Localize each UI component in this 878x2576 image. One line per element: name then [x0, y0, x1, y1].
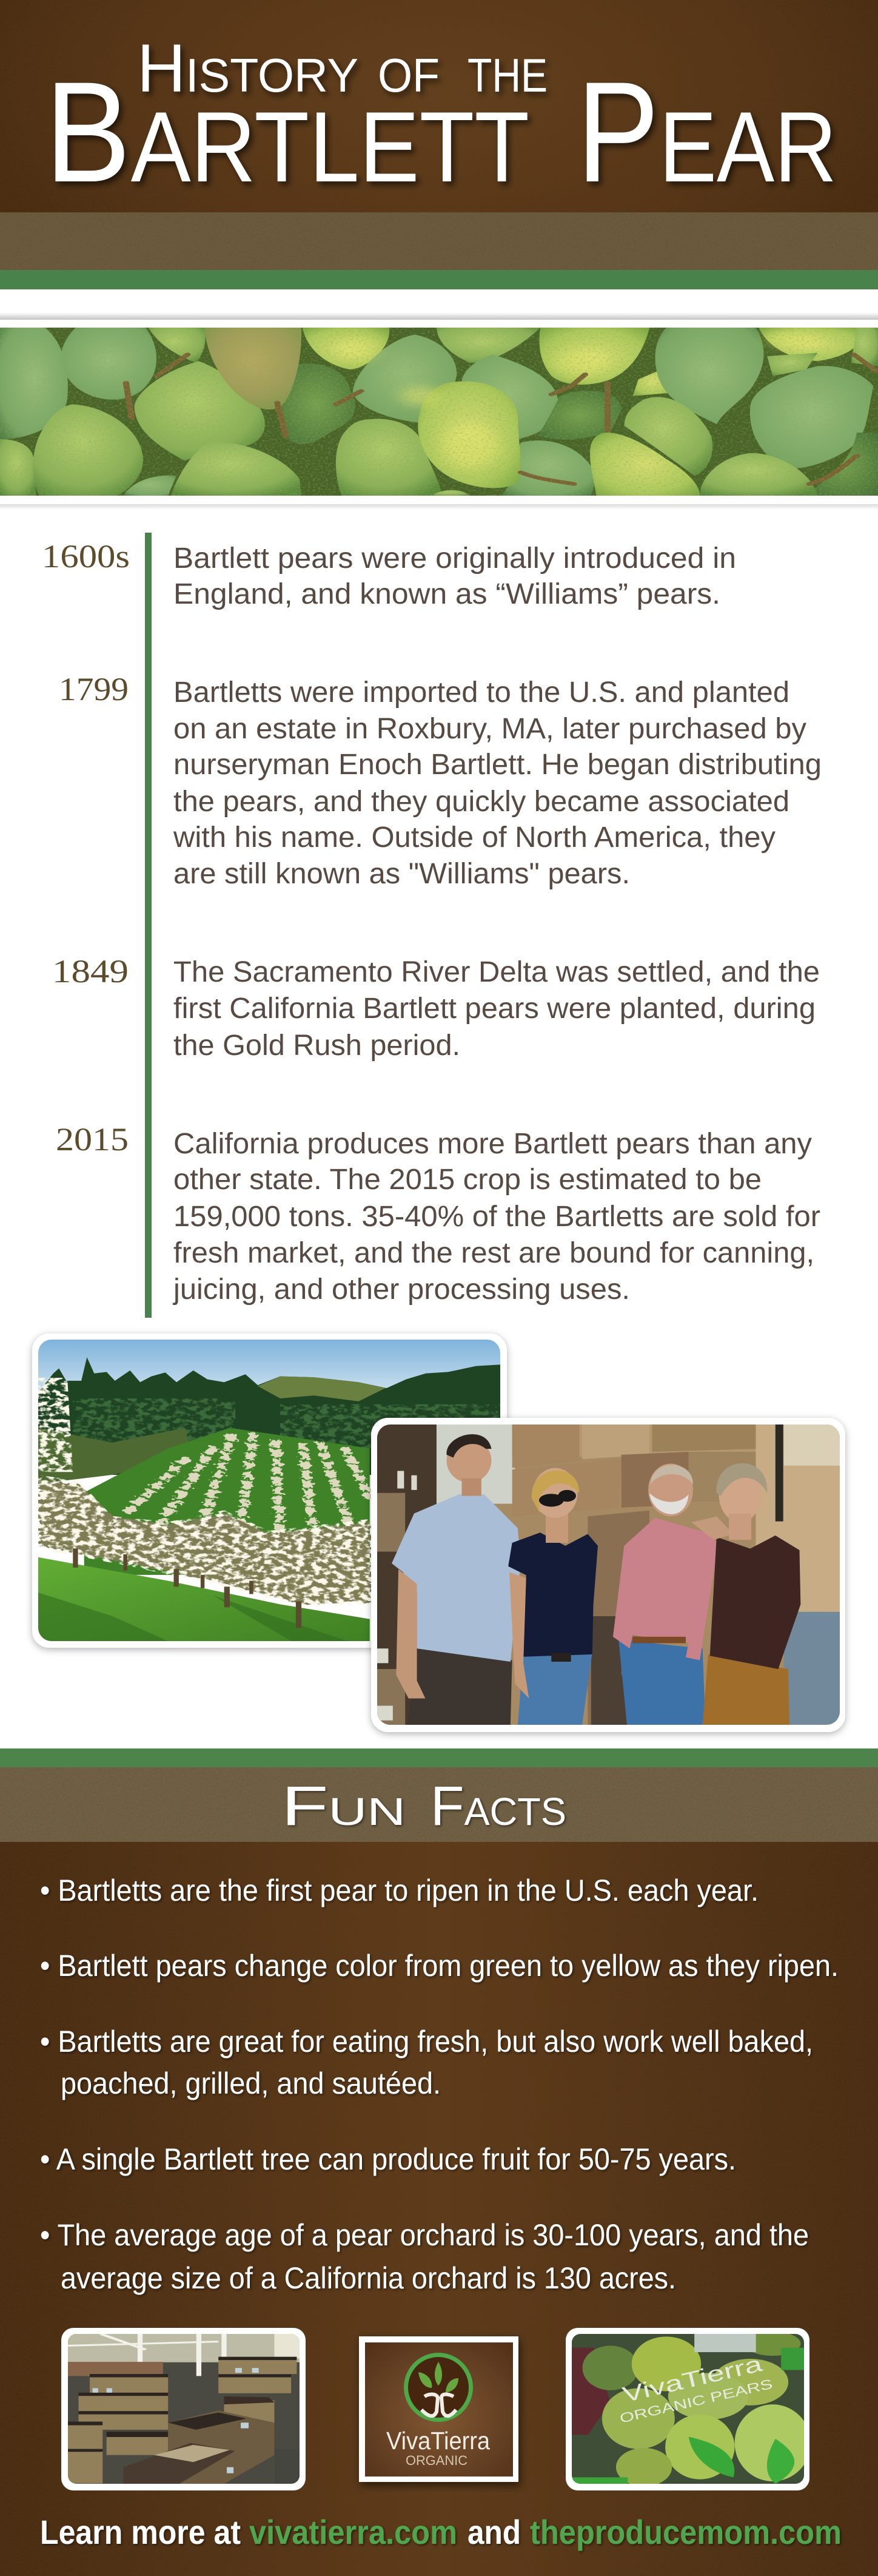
photo card: orchard [32, 1334, 507, 1648]
title: Pear [577, 52, 837, 212]
entry: 2015: juicing, and other processing uses. [172, 1273, 630, 1306]
logo wordmark: VivaTierra [386, 2427, 490, 2455]
fact list [40, 1873, 839, 2295]
entry: 1849: 1849 [52, 953, 129, 990]
timeline bar [145, 533, 152, 1318]
entry: 1600s: England, and known as “Williams” pears. [173, 578, 720, 610]
bag label text: VivaTierra [620, 2351, 765, 2407]
entry: 1849: The Sacramento River Delta was settled, and the [173, 956, 820, 988]
fact list: poached, grilled, and sautéed. [61, 2066, 441, 2100]
entry: 2015: California produces more Bartlett pears than any [173, 1128, 812, 1160]
entry: 1600s: 1600s [42, 538, 130, 575]
shadow band under header [0, 312, 878, 320]
footer: learn more [40, 2513, 842, 2551]
entry: 1799: nurseryman Enoch Bartlett. He began distributing [173, 749, 822, 781]
logo card: VivaTierra Organic [359, 2336, 518, 2482]
person: man in red striped shirt [613, 1463, 718, 1725]
panel: fun facts [0, 1748, 878, 2576]
footer: learn more: theproducemom.com [530, 2513, 842, 2551]
person: man in light blue shirt [392, 1434, 520, 1725]
entry: 2015: other state. The 2015 crop is estimated to be [173, 1164, 762, 1196]
entry: 1849: the Gold Rush period. [173, 1030, 460, 1062]
entry: 2015: 159,000 tons. 35-40% of the Bartletts are sold for [173, 1201, 820, 1233]
entry: 1799: 1799 [59, 671, 129, 707]
fact list: • A single Bartlett tree can produce fruit for 50-75 years. [40, 2142, 736, 2176]
title: of [378, 30, 440, 106]
entry: 1799: Bartletts were imported to the U.S. and planted [173, 676, 789, 709]
footer: learn more: and [467, 2513, 521, 2551]
footer: learn more: Learn more at [40, 2513, 241, 2551]
footer: learn more: vivatierra.com [249, 2513, 457, 2551]
fact list: • Bartletts are the first pear to ripen in the U.S. each year. [40, 1873, 759, 1907]
panel: timeline [42, 538, 822, 1306]
fact list: • Bartlett pears change color from green to yellow as they ripen. [40, 1949, 839, 1983]
person: woman in brown top [691, 1463, 800, 1725]
entry: 1600s: Bartlett pears were originally introduced in [173, 542, 736, 575]
entry: 1799 [59, 671, 822, 890]
photo card: stacked boxes in warehouse [61, 2328, 306, 2490]
bag label text [618, 2351, 774, 2426]
fact list: • Bartletts are great for eating fresh, but also work well baked, [40, 2025, 813, 2058]
entry: 1799: are still known as "Williams" pears. [173, 858, 630, 890]
fact list: average size of a California orchard is 130 acres. [61, 2261, 676, 2295]
title: History [137, 30, 358, 106]
bag label text: ORGANIC PEARS [618, 2376, 774, 2426]
logo emblem [404, 2353, 473, 2422]
title: Bartlett [45, 52, 529, 212]
heading: fun facts: Fun [281, 1775, 406, 1837]
heading: fun facts [281, 1775, 566, 1837]
photo card: bagged organic pears [566, 2328, 811, 2490]
panel: title header [0, 0, 878, 289]
entry: 1799: on an estate in Roxbury, MA, later purchased by [173, 713, 806, 745]
entry: 2015: fresh market, and the rest are bound for canning, [173, 1237, 814, 1269]
fact list: • The average age of a pear orchard is 30-100 years, and the [40, 2218, 809, 2252]
entry: 1849 [52, 953, 820, 1062]
entry: 1799: the pears, and they quickly became associated [173, 786, 789, 818]
entry: 1799: with his name. Outside of North America, they [173, 821, 776, 854]
entry: 1849: first California Bartlett pears were planted, during [173, 993, 816, 1025]
title: the [467, 30, 548, 106]
photo: green pears banner [0, 328, 878, 510]
person: woman in navy shirt [508, 1468, 598, 1725]
title [45, 30, 837, 212]
logo card: VivaTierra Organic: ORGANIC [406, 2453, 467, 2468]
entry: 2015: 2015 [56, 1121, 129, 1158]
heading: fun facts: Facts [431, 1775, 566, 1837]
entry: 2015 [56, 1121, 820, 1306]
entry: 1600s [42, 538, 736, 610]
photo card: four people in front of produce boxes [371, 1418, 845, 1732]
